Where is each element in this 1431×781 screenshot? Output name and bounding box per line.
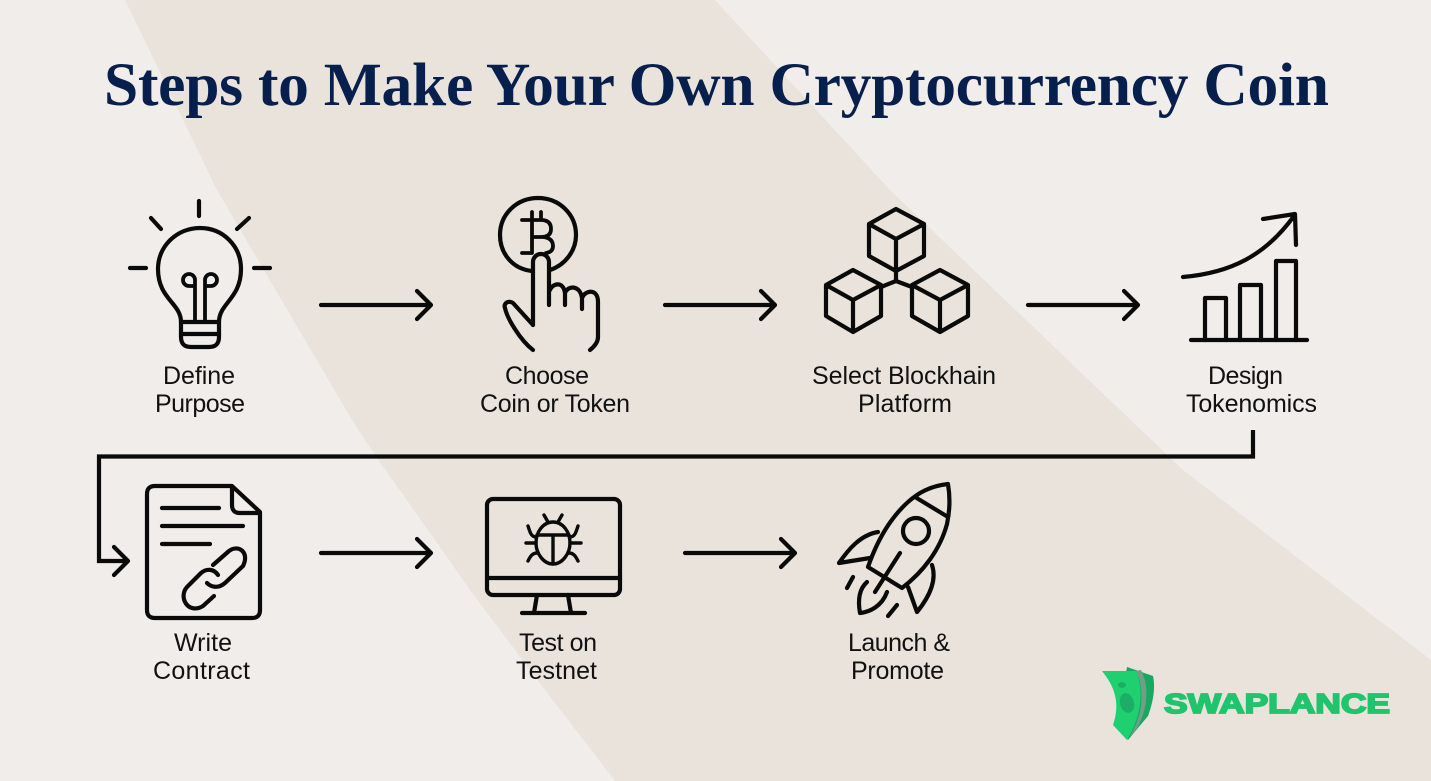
arrow 4 <box>321 539 431 567</box>
logo: swaplance <box>1102 667 1390 740</box>
connector arrow between rows <box>99 430 1253 575</box>
label: test on testnet <box>516 629 597 685</box>
label: define purpose <box>155 362 245 418</box>
label: test on testnet: Testnet <box>516 657 597 685</box>
icon: light bulb <box>130 201 270 347</box>
icon: growth chart <box>1183 214 1307 340</box>
step 6: test on testnet <box>487 499 620 685</box>
arrow 1 <box>321 291 431 319</box>
label: launch and promote: Promote <box>851 657 944 685</box>
icon: document with chain link <box>147 486 260 618</box>
label: select blockhain platform <box>812 362 996 418</box>
label: write contract: Contract <box>153 657 250 685</box>
label: select blockhain platform: Select Blockhain <box>812 362 996 390</box>
label: launch and promote: Launch & <box>848 629 950 657</box>
icon: rocket <box>839 484 949 616</box>
label: define purpose: Purpose <box>155 390 245 418</box>
label: launch and promote <box>848 629 950 685</box>
label: design tokenomics: Tokenomics <box>1186 390 1317 418</box>
title: Steps to Make Your Own Cryptocurrency Coin <box>104 51 1329 119</box>
step 7: launch and promote <box>839 484 950 685</box>
step 5: write contract <box>147 486 260 685</box>
label: define purpose: Define <box>163 362 235 390</box>
arrow 5 <box>685 539 795 567</box>
icon: monitor with bug <box>487 499 620 613</box>
label: write contract: Write <box>174 629 232 657</box>
label: write contract <box>153 629 250 685</box>
logo wordmark: SWAPLANCE <box>1164 688 1390 719</box>
step 3: select blockchain platform <box>812 209 996 418</box>
step 4: design tokenomics <box>1183 214 1317 418</box>
icon: bitcoin and pointing hand <box>500 198 598 350</box>
label: choose coin or token <box>480 362 630 418</box>
label: test on testnet: Test on <box>519 629 597 657</box>
arrow 3 <box>1028 291 1138 319</box>
icon: connected cubes <box>826 209 968 332</box>
icon: money bills <box>1102 667 1154 740</box>
label: choose coin or token: Coin or Token <box>480 390 630 418</box>
label: select blockhain platform: Platform <box>858 390 952 418</box>
label: design tokenomics <box>1186 362 1317 418</box>
label: design tokenomics: Design <box>1208 362 1283 390</box>
arrow 2 <box>665 291 775 319</box>
step 1: define purpose <box>130 201 270 418</box>
step 2: choose coin or token <box>480 198 630 418</box>
label: choose coin or token: Choose <box>505 362 589 390</box>
